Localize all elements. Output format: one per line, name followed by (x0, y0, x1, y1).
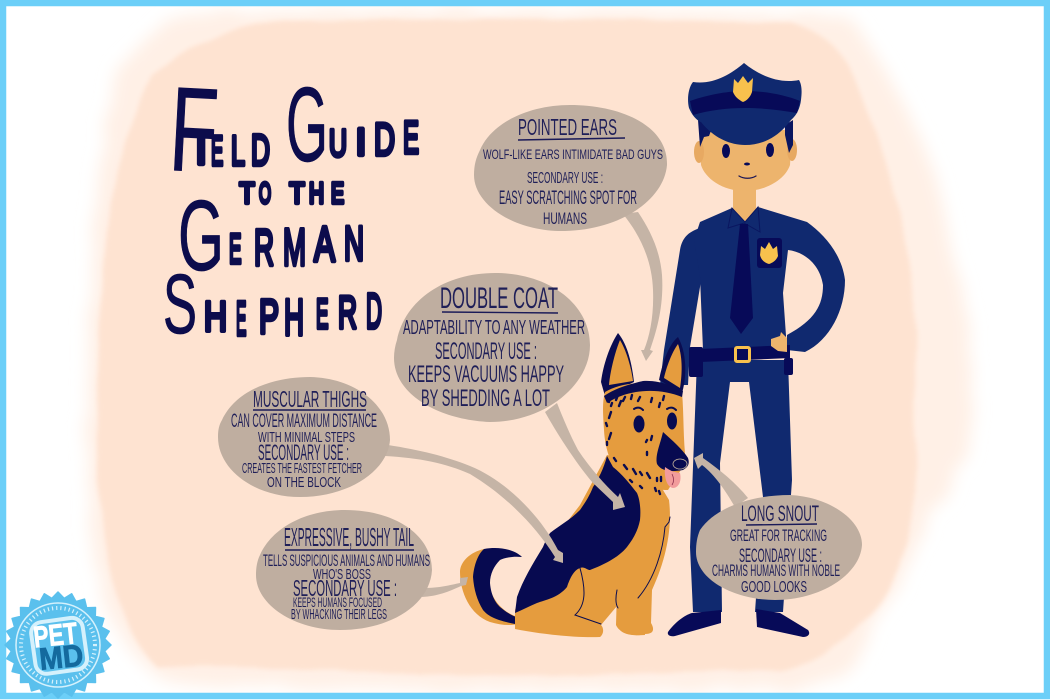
dog eyes (634, 412, 677, 432)
callout: pointed ears: HUMANS (543, 209, 587, 228)
callout: expressive bushy tail: TELLS SUSPICIOUS ANIMALS AND HUMANS (263, 551, 430, 570)
right shoe (756, 609, 809, 637)
officer left arm (660, 228, 702, 385)
title: Field Guide to the German Shepherd: E (331, 178, 344, 210)
bubble text: WOLF-LIKE EARS INTIMIDATE BAD GUYS (483, 146, 663, 162)
title: Field Guide to the German Shepherd: O (259, 178, 271, 210)
title: Field Guide to the German Shepherd: S (163, 257, 197, 351)
bubble (696, 495, 862, 600)
bubble heading: DOUBLE COAT (440, 282, 558, 315)
dog head (603, 383, 686, 490)
callout: muscular thighs: CAN COVER MAXIMUM DISTANCE (231, 411, 377, 432)
bubble pointer (694, 453, 748, 507)
callout: expressive bushy tail: BY WHACKING THEIR LEGS (291, 606, 387, 623)
bubble text: ADAPTABILITY TO ANY WEATHER (403, 317, 585, 339)
heading underline (285, 549, 414, 551)
hat badge (733, 76, 753, 102)
heading underline (518, 138, 625, 140)
callout: double coat: KEEPS VACUUMS HAPPY (408, 361, 564, 388)
front leg left (616, 590, 645, 635)
belt (700, 345, 790, 362)
saddle: dark back coat (515, 456, 640, 613)
callout: expressive bushy tail: EXPRESSIVE, BUSHY TAIL (284, 522, 414, 552)
heading underline (746, 524, 817, 525)
snout (657, 432, 689, 471)
callout: pointed ears: SECONDARY USE : (527, 170, 603, 187)
dog body (515, 455, 670, 637)
title: Field Guide to the German Shepherd: D (251, 126, 270, 175)
callout: expressive bushy tail: KEEPS HUMANS FOCUSED (293, 594, 382, 610)
callout: muscular thighs (218, 377, 563, 563)
brows (634, 408, 676, 410)
mouth (739, 176, 756, 178)
callout: expressive bushy tail: SECONDARY USE : (293, 575, 397, 601)
right ear (659, 337, 685, 393)
title: Field Guide to the German Shepherd: R (338, 287, 357, 338)
left holster (689, 347, 703, 377)
peach painted backdrop (97, 19, 917, 676)
title: Field Guide to the German Shepherd: G (178, 180, 224, 292)
callout: double coat: BY SHEDDING A LOT (421, 385, 550, 412)
callout: pointed ears (474, 105, 667, 361)
callout: muscular thighs: ON THE BLOCK (267, 474, 341, 491)
hair (698, 120, 793, 153)
callout: expressive bushy tail: WHO'S BOSS (313, 566, 371, 583)
officer head (699, 130, 792, 191)
bubble (256, 510, 432, 630)
title: Field Guide to the German Shepherd: H (204, 293, 227, 340)
callout: long snout: GOOD LOOKS (741, 579, 807, 596)
title: Field Guide to the German Shepherd: U (329, 123, 347, 165)
callout: long snout: CHARMS HUMANS WITH NOBLE (712, 561, 840, 580)
title: Field Guide to the German Shepherd: H (284, 289, 304, 346)
title: Field Guide to the German Shepherd: A (314, 218, 335, 272)
badge ring (16, 603, 100, 687)
title: Field Guide to the German Shepherd: E (403, 112, 419, 163)
tongue (665, 467, 681, 488)
bubble (218, 377, 390, 497)
title: Field Guide to the German Shepherd: T (240, 178, 255, 210)
title: Field Guide to the German Shepherd: D (374, 114, 395, 165)
PetMD logo badge (5, 592, 111, 698)
police hat (688, 63, 802, 145)
logo word PET: PET (32, 617, 79, 654)
right holster (784, 358, 793, 375)
title: Field Guide to the German Shepherd: E (211, 127, 223, 174)
title: Field Guide to the German Shepherd: P (259, 291, 279, 344)
title: Field Guide to the German Shepherd: F (167, 62, 221, 198)
head dark band (604, 381, 683, 403)
tongue line (672, 474, 674, 485)
officer torso and bent arm (694, 207, 845, 352)
title: Field Guide to the German Shepherd: I (356, 122, 366, 164)
bubble heading: LONG SNOUT (741, 501, 819, 526)
tail (460, 549, 518, 625)
eyes (722, 143, 774, 166)
chest badge (757, 238, 782, 268)
left ear (601, 333, 634, 396)
officer hand (771, 332, 787, 352)
officer trousers (690, 360, 792, 612)
title: Field Guide to the German Shepherd: T (290, 178, 305, 210)
tail dark tip (473, 548, 522, 624)
officer tie (730, 224, 753, 334)
badge ticks (21, 608, 95, 682)
leg outlines (575, 517, 670, 624)
title: Field Guide to the German Shepherd: E (236, 293, 246, 346)
callout: expressive bushy tail (256, 510, 468, 630)
bubble pointer (422, 577, 468, 597)
title: Field Guide to the German Shepherd (163, 62, 419, 351)
bubble heading: MUSCULAR THIGHS (253, 386, 367, 412)
callout: muscular thighs: WITH MINIMAL STEPS (258, 429, 355, 446)
callout: double coat (394, 273, 625, 510)
officer neck (733, 180, 756, 222)
bubble text: GREAT FOR TRACKING (730, 526, 827, 545)
callout: long snout: SECONDARY USE : (739, 546, 822, 567)
title: Field Guide to the German Shepherd: H (309, 178, 324, 210)
bubble pointer (545, 403, 625, 510)
badge scalloped edge (5, 592, 111, 698)
German shepherd dog (460, 333, 689, 637)
logo word MD: MD (38, 637, 85, 677)
title: Field Guide to the German Shepherd: I (195, 125, 207, 174)
officer collar (728, 207, 760, 232)
belt buckle (736, 348, 750, 362)
left ear (694, 141, 704, 163)
title: Field Guide to the German Shepherd: M (283, 219, 306, 277)
right ear (787, 139, 797, 161)
heading underline (253, 409, 366, 411)
callout: double coat: SECONDARY USE : (435, 338, 537, 365)
callout: pointed ears: EASY SCRATCHING SPOT FOR (499, 188, 637, 209)
police officer (660, 63, 845, 637)
title: Field Guide to the German Shepherd: E (316, 290, 328, 337)
title: Field Guide to the German Shepherd: R (254, 219, 274, 276)
title: Field Guide to the German Shepherd: L (231, 127, 245, 174)
title: Field Guide to the German Shepherd: N (344, 218, 364, 271)
callout: muscular thighs: CREATES THE FASTEST FETCHER (242, 460, 362, 477)
right ear inner (664, 344, 682, 388)
callout: long snout (694, 453, 862, 600)
title: Field Guide to the German Shepherd: G (286, 66, 328, 184)
bubble pointer (623, 212, 662, 361)
title: Field Guide to the German Shepherd: E (229, 225, 242, 272)
hat band (690, 91, 800, 115)
bubble (394, 273, 590, 422)
title: Field Guide to the German Shepherd: D (366, 285, 382, 339)
fur marks (606, 395, 664, 494)
bubble pointer (385, 445, 563, 563)
nose (673, 459, 687, 469)
left ear inner (609, 340, 633, 385)
heading underline (442, 312, 558, 313)
bubble (474, 105, 667, 231)
bubble heading: POINTED EARS (518, 114, 617, 140)
left shoe (668, 610, 721, 636)
badge rounded square (30, 616, 88, 675)
callout: muscular thighs: SECONDARY USE : (258, 440, 349, 465)
